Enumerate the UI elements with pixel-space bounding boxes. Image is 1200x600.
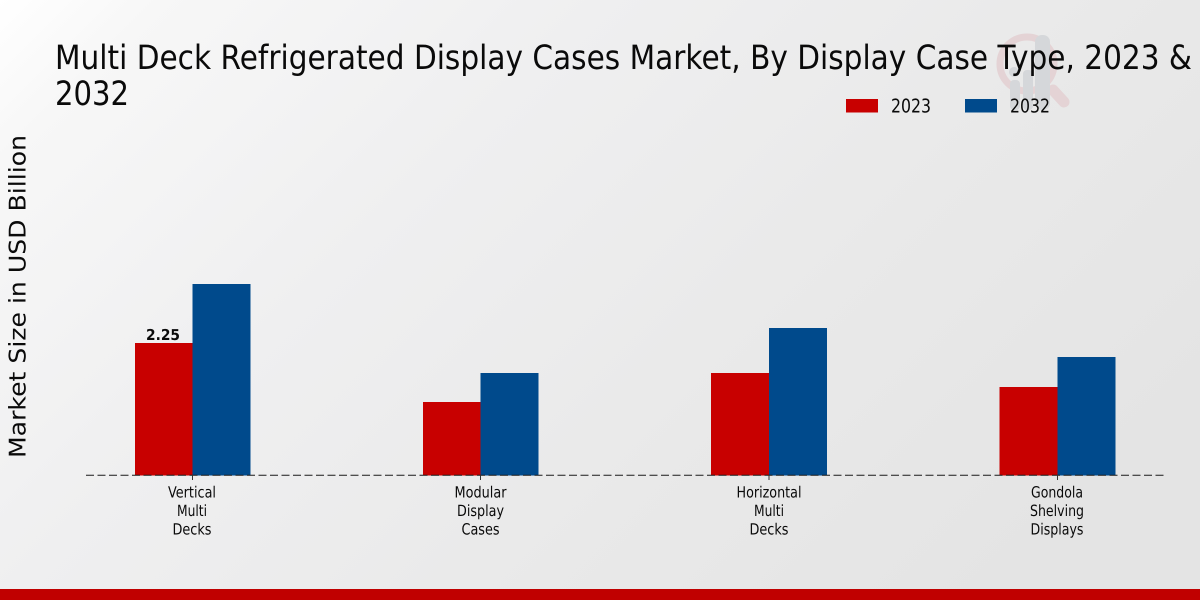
legend: 2023: 2023 [891,96,931,118]
x label: Horizontal Multi Decks: Horizontal [736,484,802,502]
title: 2032 [55,74,129,113]
x label: Horizontal Multi Decks [736,484,802,538]
footer bar [0,589,1200,600]
group: Modular Display Cases [423,373,538,476]
group: Horizontal Multi Decks [711,328,827,476]
y axis label: Market Size in USD Billion [6,135,32,458]
x label: Horizontal Multi Decks: Multi [754,502,784,520]
x label: Gondola Shelving Displays [1030,484,1084,538]
x label: Modular Display Cases: Cases [462,520,500,538]
x label: Vertical Multi Decks: Decks [172,520,212,538]
x label: Vertical Multi Decks: Multi [177,502,207,520]
x label: Modular Display Cases [454,484,507,538]
group: Vertical Multi Decks [135,284,250,476]
icon: watermark magnifier with bars [1000,35,1064,110]
value label: 2.25 [146,326,180,344]
legend: 2023 [846,96,931,118]
title [55,38,1192,113]
x label: Gondola Shelving Displays: Gondola [1031,484,1083,502]
x label: Modular Display Cases: Modular [454,484,507,502]
legend: 2032 [965,96,1050,118]
x label: Vertical Multi Decks [168,484,216,538]
x axis baseline [86,475,1164,480]
x label: Vertical Multi Decks: Vertical [168,484,216,502]
x label: Gondola Shelving Displays: Displays [1030,520,1084,538]
bar chart [135,284,1116,476]
x label: Gondola Shelving Displays: Shelving [1030,502,1084,520]
x label: Modular Display Cases: Display [457,502,504,520]
group: Gondola Shelving Displays [1000,357,1116,476]
x label: Horizontal Multi Decks: Decks [750,520,788,538]
legend [846,96,1050,118]
legend: 2032: 2032 [1010,96,1050,118]
